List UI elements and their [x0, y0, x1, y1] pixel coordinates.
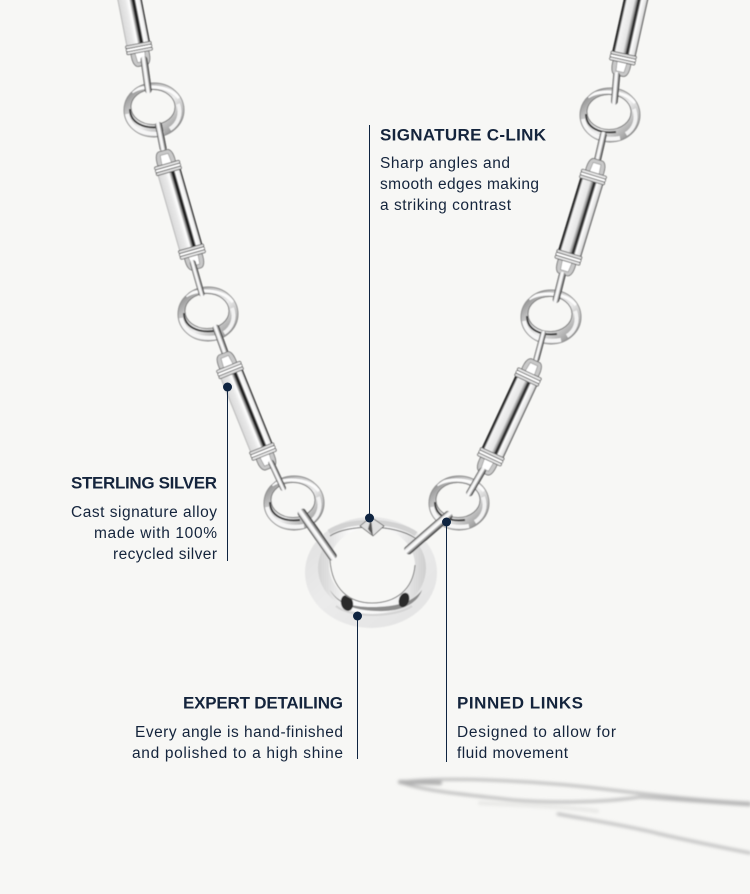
necklace	[114, 0, 651, 628]
left top rod	[114, 0, 151, 50]
necklace shadow	[400, 779, 750, 853]
left third rod	[211, 348, 282, 473]
text: signature c-link description: Sharp angles and	[380, 155, 510, 172]
text: pinned links description: fluid movement	[457, 745, 569, 762]
text: expert detailing description: Every angle is hand-finished	[135, 724, 343, 741]
right second rod	[551, 156, 611, 278]
left pin	[296, 507, 338, 562]
central C-link ring	[305, 517, 437, 628]
callout: expert detailing	[132, 612, 362, 762]
heading: expert detailing: EXPERT DETAILING	[183, 694, 343, 712]
right pin	[403, 510, 454, 556]
heading: signature c-link: SIGNATURE C-LINK	[380, 126, 547, 144]
callout: signature c-link	[365, 125, 547, 522]
text: expert detailing description	[132, 724, 343, 762]
text: sterling silver description: made with 100%	[94, 525, 217, 542]
text: signature c-link description: a striking contrast	[380, 197, 512, 214]
left second rod	[151, 147, 209, 273]
text: sterling silver description	[71, 504, 217, 563]
right third rod	[471, 355, 547, 479]
callout: pinned links	[442, 518, 616, 762]
marker: expert detailing	[353, 612, 362, 620]
right links and rods	[429, 0, 651, 530]
text: signature c-link description	[380, 155, 539, 214]
text: pinned links description: Designed to allow for	[457, 724, 616, 741]
text: expert detailing description: and polished to a high shine	[132, 745, 343, 762]
left links and rods	[114, 0, 324, 530]
marker: pinned links	[442, 518, 451, 526]
callout: sterling silver	[71, 382, 232, 563]
heading: pinned links: PINNED LINKS	[457, 694, 583, 712]
diamond detail	[360, 517, 384, 536]
marker: sterling silver	[223, 382, 232, 392]
marker: signature c-link	[365, 514, 374, 522]
text: pinned links description	[457, 724, 616, 762]
heading: sterling silver: STERLING SILVER	[71, 474, 217, 492]
text: sterling silver description: Cast signature alloy	[71, 504, 217, 521]
text: signature c-link description: smooth edges making	[380, 176, 539, 193]
text: sterling silver description: recycled silver	[113, 546, 217, 563]
right top rod	[611, 0, 651, 61]
